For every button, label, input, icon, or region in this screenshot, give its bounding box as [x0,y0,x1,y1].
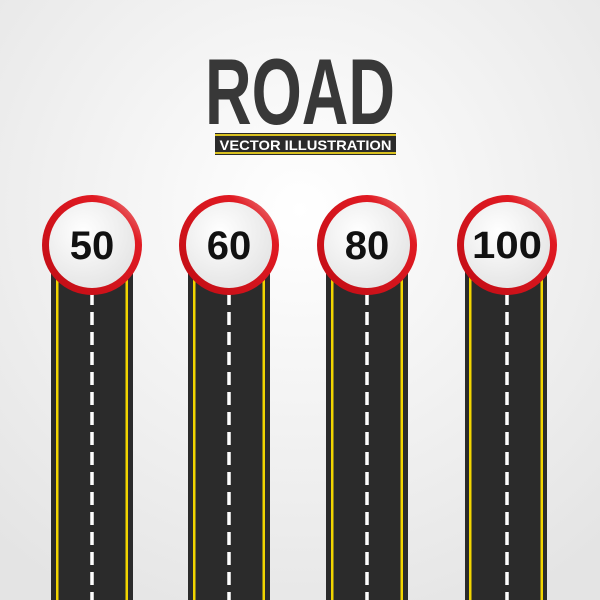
road 2 [188,262,270,600]
road 3 [326,262,408,600]
subtitle banner [215,133,396,155]
sign: 100: 100 [472,225,542,267]
road 1 [51,262,133,600]
subtitle banner: VECTOR ILLUSTRATION [220,137,392,153]
title: ROAD [205,39,395,144]
sign: 80: 80 [345,224,389,268]
road 4 [465,262,547,600]
sign: 60: 60 [207,224,251,268]
sign: 50: 50 [70,224,114,268]
sign: 80 [317,195,417,295]
sign: 100 [457,195,557,295]
sign: 60 [179,195,279,295]
sign: 50 [42,195,142,295]
